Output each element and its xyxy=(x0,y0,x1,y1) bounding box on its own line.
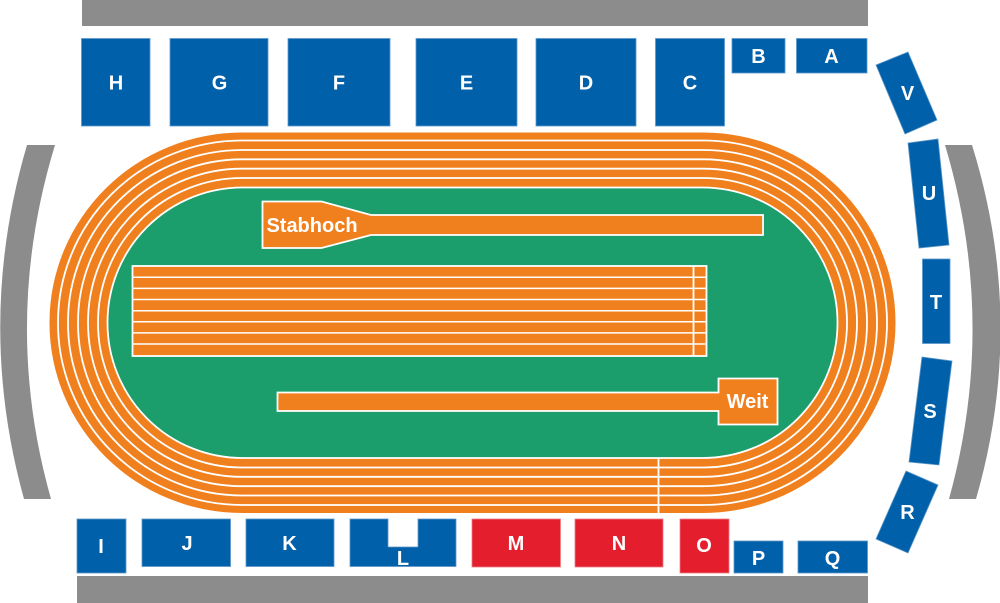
section M xyxy=(472,519,560,567)
running track xyxy=(50,132,896,513)
section C: C xyxy=(683,72,697,94)
section O xyxy=(680,519,729,573)
section B: B xyxy=(751,46,766,68)
section P: P xyxy=(752,548,765,570)
section G xyxy=(170,38,268,126)
section Q xyxy=(798,541,868,573)
section J: J xyxy=(181,533,193,555)
section P xyxy=(734,541,783,573)
section T: T xyxy=(930,292,942,314)
section Q: Q xyxy=(825,548,840,570)
stand: top grey xyxy=(82,0,868,26)
section I xyxy=(77,519,126,573)
section O: O xyxy=(696,535,712,557)
section S: S xyxy=(923,401,937,423)
section H: H xyxy=(109,72,123,94)
section V: V xyxy=(901,83,915,105)
stand: bottom grey xyxy=(77,576,868,603)
section C xyxy=(656,38,724,126)
section T xyxy=(922,259,950,344)
section H xyxy=(82,38,150,126)
track surface xyxy=(50,132,896,513)
section U: U xyxy=(922,183,936,205)
section E xyxy=(416,38,517,126)
section R: R xyxy=(900,502,915,524)
section M: M xyxy=(508,533,524,555)
section B xyxy=(732,38,785,73)
finish line xyxy=(658,458,660,513)
section L xyxy=(350,519,456,570)
section A: A xyxy=(824,46,839,68)
section E: E xyxy=(460,72,473,94)
pole vault runway xyxy=(262,202,763,248)
section D: D xyxy=(579,72,593,94)
lane lines xyxy=(58,140,887,505)
section J xyxy=(142,519,230,566)
section V xyxy=(876,52,937,134)
section U xyxy=(908,139,949,248)
section S xyxy=(909,357,952,465)
section L: L xyxy=(397,548,409,570)
section N: N xyxy=(612,533,626,555)
stand: left grey arc xyxy=(0,145,55,499)
section K: K xyxy=(282,533,297,555)
section F xyxy=(288,38,390,126)
section N xyxy=(575,519,663,567)
section R xyxy=(876,471,938,553)
infield xyxy=(108,188,838,458)
section A xyxy=(796,38,867,73)
long jump runway xyxy=(278,378,778,424)
stand: right grey arc xyxy=(945,145,1000,499)
sprint straight xyxy=(132,266,707,356)
pole vault runway: Stabhoch xyxy=(266,215,358,237)
section G: G xyxy=(212,72,227,94)
section D xyxy=(536,38,636,126)
long jump runway: Weit xyxy=(727,391,769,413)
section K xyxy=(246,519,334,566)
section F: F xyxy=(333,72,345,94)
section I: I xyxy=(98,536,104,558)
